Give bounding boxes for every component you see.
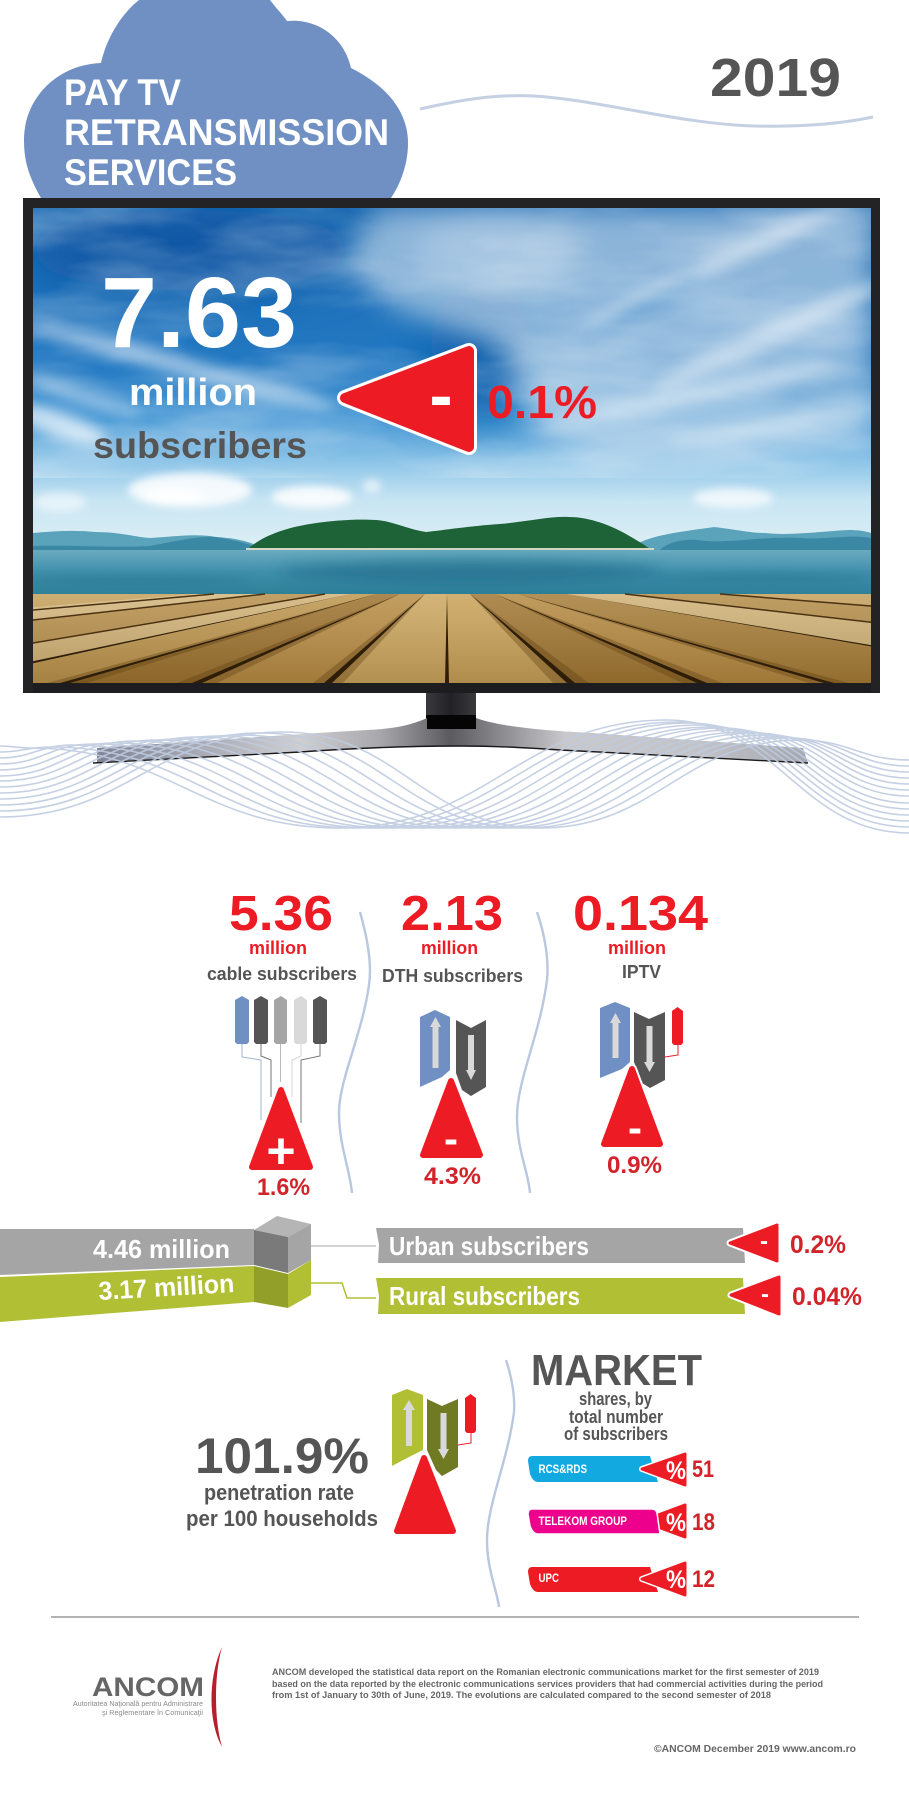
column: cable subscribers: million [249,938,307,958]
column: IPTV: - [628,1104,642,1151]
total change badge [345,351,597,447]
market heading: total number [569,1407,663,1427]
divider: cable and DTH [339,912,370,1193]
methodology note: from 1st of January to 30th of June, 2019. The evolutions are calculated compared to the second semester of 2018 [272,1690,771,1701]
ANCOM logo: ANCOM [92,1672,204,1702]
icon: satellite up and down arrows [420,1010,486,1096]
market row: Telekom Group: % [666,1509,686,1537]
header cloud with title: SERVICES [64,152,237,193]
market heading [531,1346,702,1444]
icon: cable connectors [235,996,327,1123]
decline badge [423,1081,480,1155]
total subscribers stat: 7.63 [101,257,297,369]
column: IPTV: IPTV [622,962,661,982]
column: cable subscribers: 1.6% [257,1174,310,1201]
rural band: 3.17 million [98,1268,235,1306]
ANCOM logo: şi Reglementare în Comunicaţii [102,1708,203,1717]
column: IPTV: million [608,938,666,958]
urban subscribers row [376,1225,846,1263]
market row: RCS&RDS: 51 [692,1456,714,1483]
urban subscribers row: - [760,1228,768,1255]
urban and rural split chart [0,1216,376,1322]
total subscribers stat: million [129,372,257,414]
rural band [0,1266,254,1322]
urban band: 4.46 million [93,1234,230,1264]
total change badge: 0.1% [487,376,597,428]
market row: Telekom Group: 18 [692,1509,715,1536]
market row: RCS&RDS: % [666,1457,686,1485]
urban band [0,1229,254,1275]
header cloud with title: RETRANSMISSION [64,112,389,153]
water [33,550,871,594]
television [0,190,909,763]
market row: Telekom Group: TELEKOM GROUP [538,1514,627,1528]
total change badge: - [429,356,453,434]
header cloud with title: PAY TV [64,72,181,113]
decline badge [604,1069,660,1144]
column: DTH subscribers: - [444,1115,458,1162]
market row: UPC: UPC [538,1571,559,1585]
column: DTH subscribers: DTH subscribers [382,966,523,986]
icon: penetration rate arrows and triangle [392,1389,476,1531]
market row: RCS&RDS [528,1454,714,1485]
divider: DTH and IPTV [517,912,548,1193]
methodology note: ANCOM developed the statistical data report on the Romanian electronic communications market for the first semester of 2019 [272,1667,819,1678]
market heading: of subscribers [564,1424,668,1444]
penetration rate stat: 101.9% [195,1428,369,1484]
tv frame [23,198,880,693]
market heading: shares, by [579,1389,652,1409]
methodology note [272,1667,823,1701]
urban subscribers row: 0.2% [790,1231,846,1259]
rural subscribers row [376,1277,862,1314]
island [248,517,650,549]
ANCOM logo [73,1647,222,1747]
connector lines [311,1245,376,1247]
tv screen photo [33,208,871,683]
total subscribers stat: subscribers [93,425,307,466]
urban subscribers row: Urban subscribers [389,1231,589,1261]
low clouds [34,473,773,512]
column: IPTV: 0.9% [607,1152,662,1179]
column: cable subscribers: + [266,1123,296,1179]
penetration rate stat [186,1428,378,1531]
market row: UPC: % [666,1566,686,1594]
column: DTH subscribers: 2.13 [401,887,503,941]
methodology note: based on the data reported by the electronic communications services providers that had commercial activities during the period [272,1679,823,1690]
header cloud with title [24,0,408,198]
market row: Telekom Group [528,1505,715,1537]
rural subscribers row: 0.04% [792,1283,862,1311]
market row: UPC: 12 [692,1566,715,1593]
wooden deck [0,594,909,683]
penetration rate stat: per 100 households [186,1506,378,1531]
rural subscribers row: - [761,1281,769,1308]
market row: UPC [528,1563,715,1595]
growth badge [252,1090,310,1167]
divider: penetration and market [487,1360,514,1607]
icon: IPTV arrows and plug [600,1002,683,1088]
column: IPTV [573,887,708,1179]
ANCOM logo: Autoritatea Naţională pentru Administrare [73,1699,203,1708]
column: DTH subscribers [382,887,523,1190]
column: IPTV: 0.134 [573,887,708,941]
column: cable subscribers [207,887,357,1201]
total subscribers stat [93,257,307,466]
column: cable subscribers: cable subscribers [207,964,357,984]
header wave line [420,96,873,126]
tv stand [93,693,808,763]
column: cable subscribers: 5.36 [229,887,333,941]
market row: RCS&RDS: RCS&RDS [538,1462,587,1476]
distant mountains [33,527,871,550]
penetration rate stat: penetration rate [204,1480,354,1505]
copyright line: ©ANCOM December 2019 www.ancom.ro [654,1744,856,1755]
column: DTH subscribers: 4.3% [424,1163,481,1190]
footer rule [51,1616,859,1618]
column: DTH subscribers: million [421,938,478,958]
rural subscribers row: Rural subscribers [389,1281,580,1311]
year: 2019 [710,48,841,108]
3D block [254,1216,311,1308]
market heading: MARKET [531,1346,702,1395]
decorative wave bundle [0,720,909,833]
